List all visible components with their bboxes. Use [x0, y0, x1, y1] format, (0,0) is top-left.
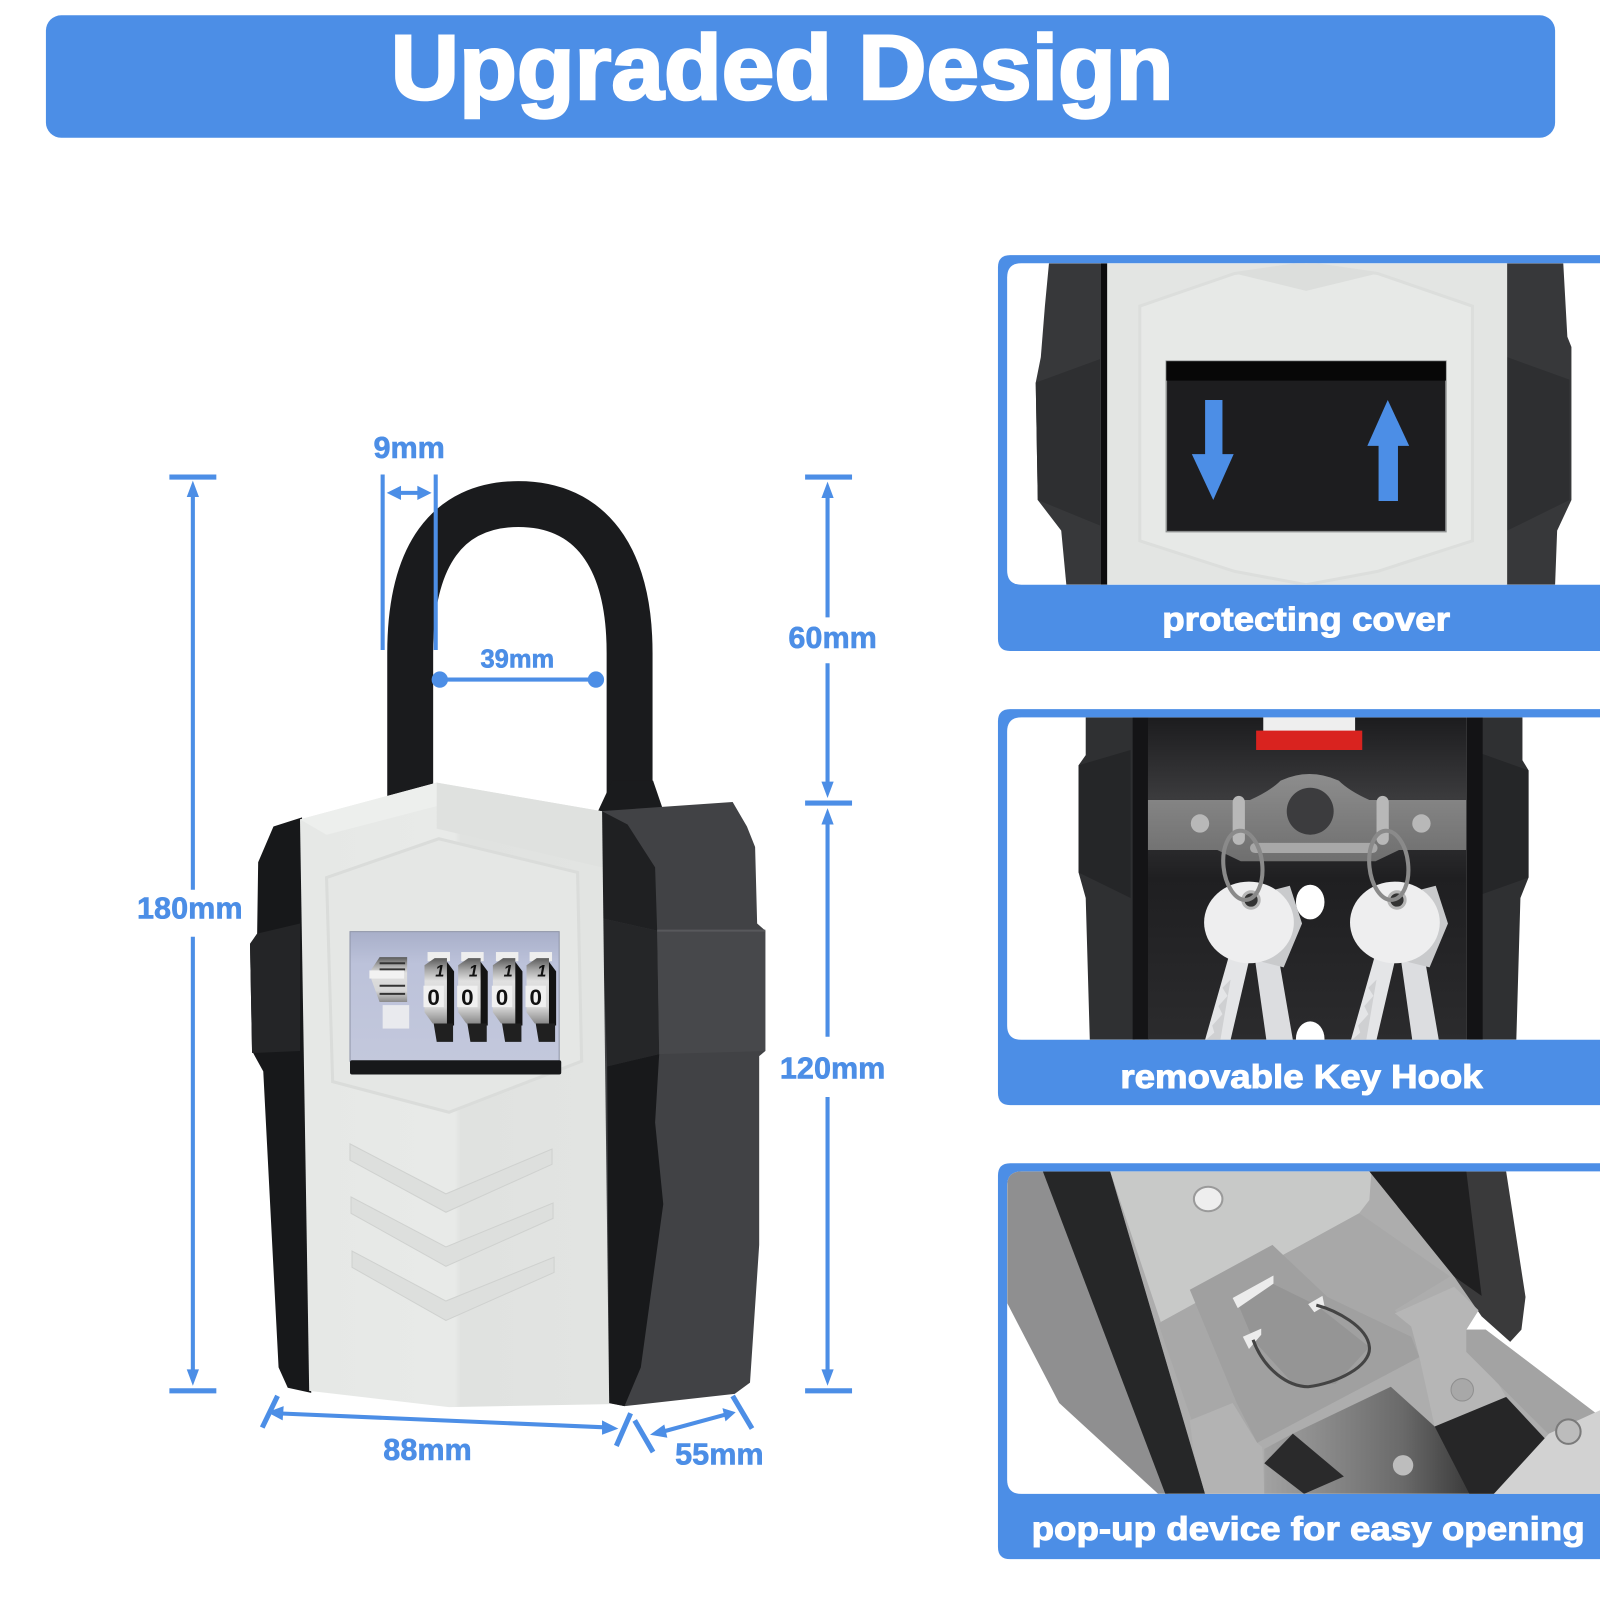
caption: pop-up device for easy opening [1032, 1511, 1585, 1548]
dimension: 120mm body height [780, 808, 885, 1391]
chevron vents [350, 1144, 554, 1320]
body right side [600, 802, 765, 1406]
dial 3: 0 [496, 985, 508, 1010]
dial 1: 1 [435, 963, 444, 981]
dimension: 55mm depth [635, 1396, 764, 1471]
dial 2: 0 [461, 985, 474, 1010]
slider button [369, 957, 409, 1029]
panel: protecting cover [998, 255, 1600, 651]
dimension: 180mm height: 180mm [137, 891, 243, 925]
dial 1 [423, 952, 454, 1042]
close-up: cover on lock [1036, 263, 1571, 585]
arrow up [1367, 400, 1409, 501]
dial 4: 1 [537, 963, 546, 981]
dial 2 [457, 952, 488, 1042]
dial 4: 0 [529, 985, 542, 1010]
dimension: 39mm shackle width: 39mm [480, 645, 554, 673]
panel: pop-up device [998, 1163, 1600, 1559]
key set right [1350, 829, 1448, 1040]
dial 3: 1 [504, 963, 513, 981]
combination window [350, 932, 561, 1074]
product: key lock box [250, 504, 765, 1407]
dimension: 55mm depth: 55mm [675, 1437, 764, 1471]
dial 3 [492, 952, 522, 1042]
centre recess [1264, 1387, 1494, 1494]
dimension: 60mm shackle height: 60mm [788, 621, 877, 655]
red latch [1256, 717, 1362, 750]
pit [1435, 1397, 1549, 1494]
shackle [410, 504, 665, 816]
title: Upgraded Design [391, 17, 1173, 119]
right hinge [1395, 1287, 1506, 1427]
close-up: pop-up mechanism [1007, 1171, 1600, 1494]
arrow down [1192, 400, 1234, 500]
cover window [1166, 361, 1446, 532]
body left side [250, 817, 311, 1393]
caption: protecting cover [1162, 602, 1450, 639]
dimension: 88mm width: 88mm [383, 1433, 472, 1467]
dial 2: 1 [469, 963, 478, 981]
caption: removable Key Hook [1120, 1059, 1483, 1096]
pull tab [1190, 1245, 1416, 1393]
dimension: 88mm width [262, 1396, 631, 1467]
holes [1296, 885, 1324, 919]
dimension: 60mm shackle height [788, 477, 877, 803]
title banner [46, 15, 1555, 138]
dimension: 9mm shackle thickness [373, 431, 445, 650]
dial 4 [526, 952, 556, 1042]
left hinge [1190, 1403, 1264, 1494]
key set left [1204, 829, 1302, 1040]
side rail [1466, 1330, 1600, 1439]
close-up: open lock with keys [1079, 717, 1529, 1056]
dimension: 180mm height [137, 477, 243, 1391]
dimension: 39mm shackle width [432, 645, 604, 688]
interior base [1110, 1171, 1600, 1494]
white front face [300, 783, 609, 1407]
lid [1369, 1171, 1526, 1342]
key hook plate [1148, 774, 1466, 861]
panel: removable key hook [998, 709, 1600, 1105]
wire pull loop [1253, 1305, 1369, 1387]
plate [1158, 1214, 1358, 1419]
dimension: 120mm body height: 120mm [780, 1052, 885, 1086]
dial 1: 0 [427, 985, 440, 1010]
dimension: 9mm shackle thickness: 9mm [373, 431, 445, 465]
